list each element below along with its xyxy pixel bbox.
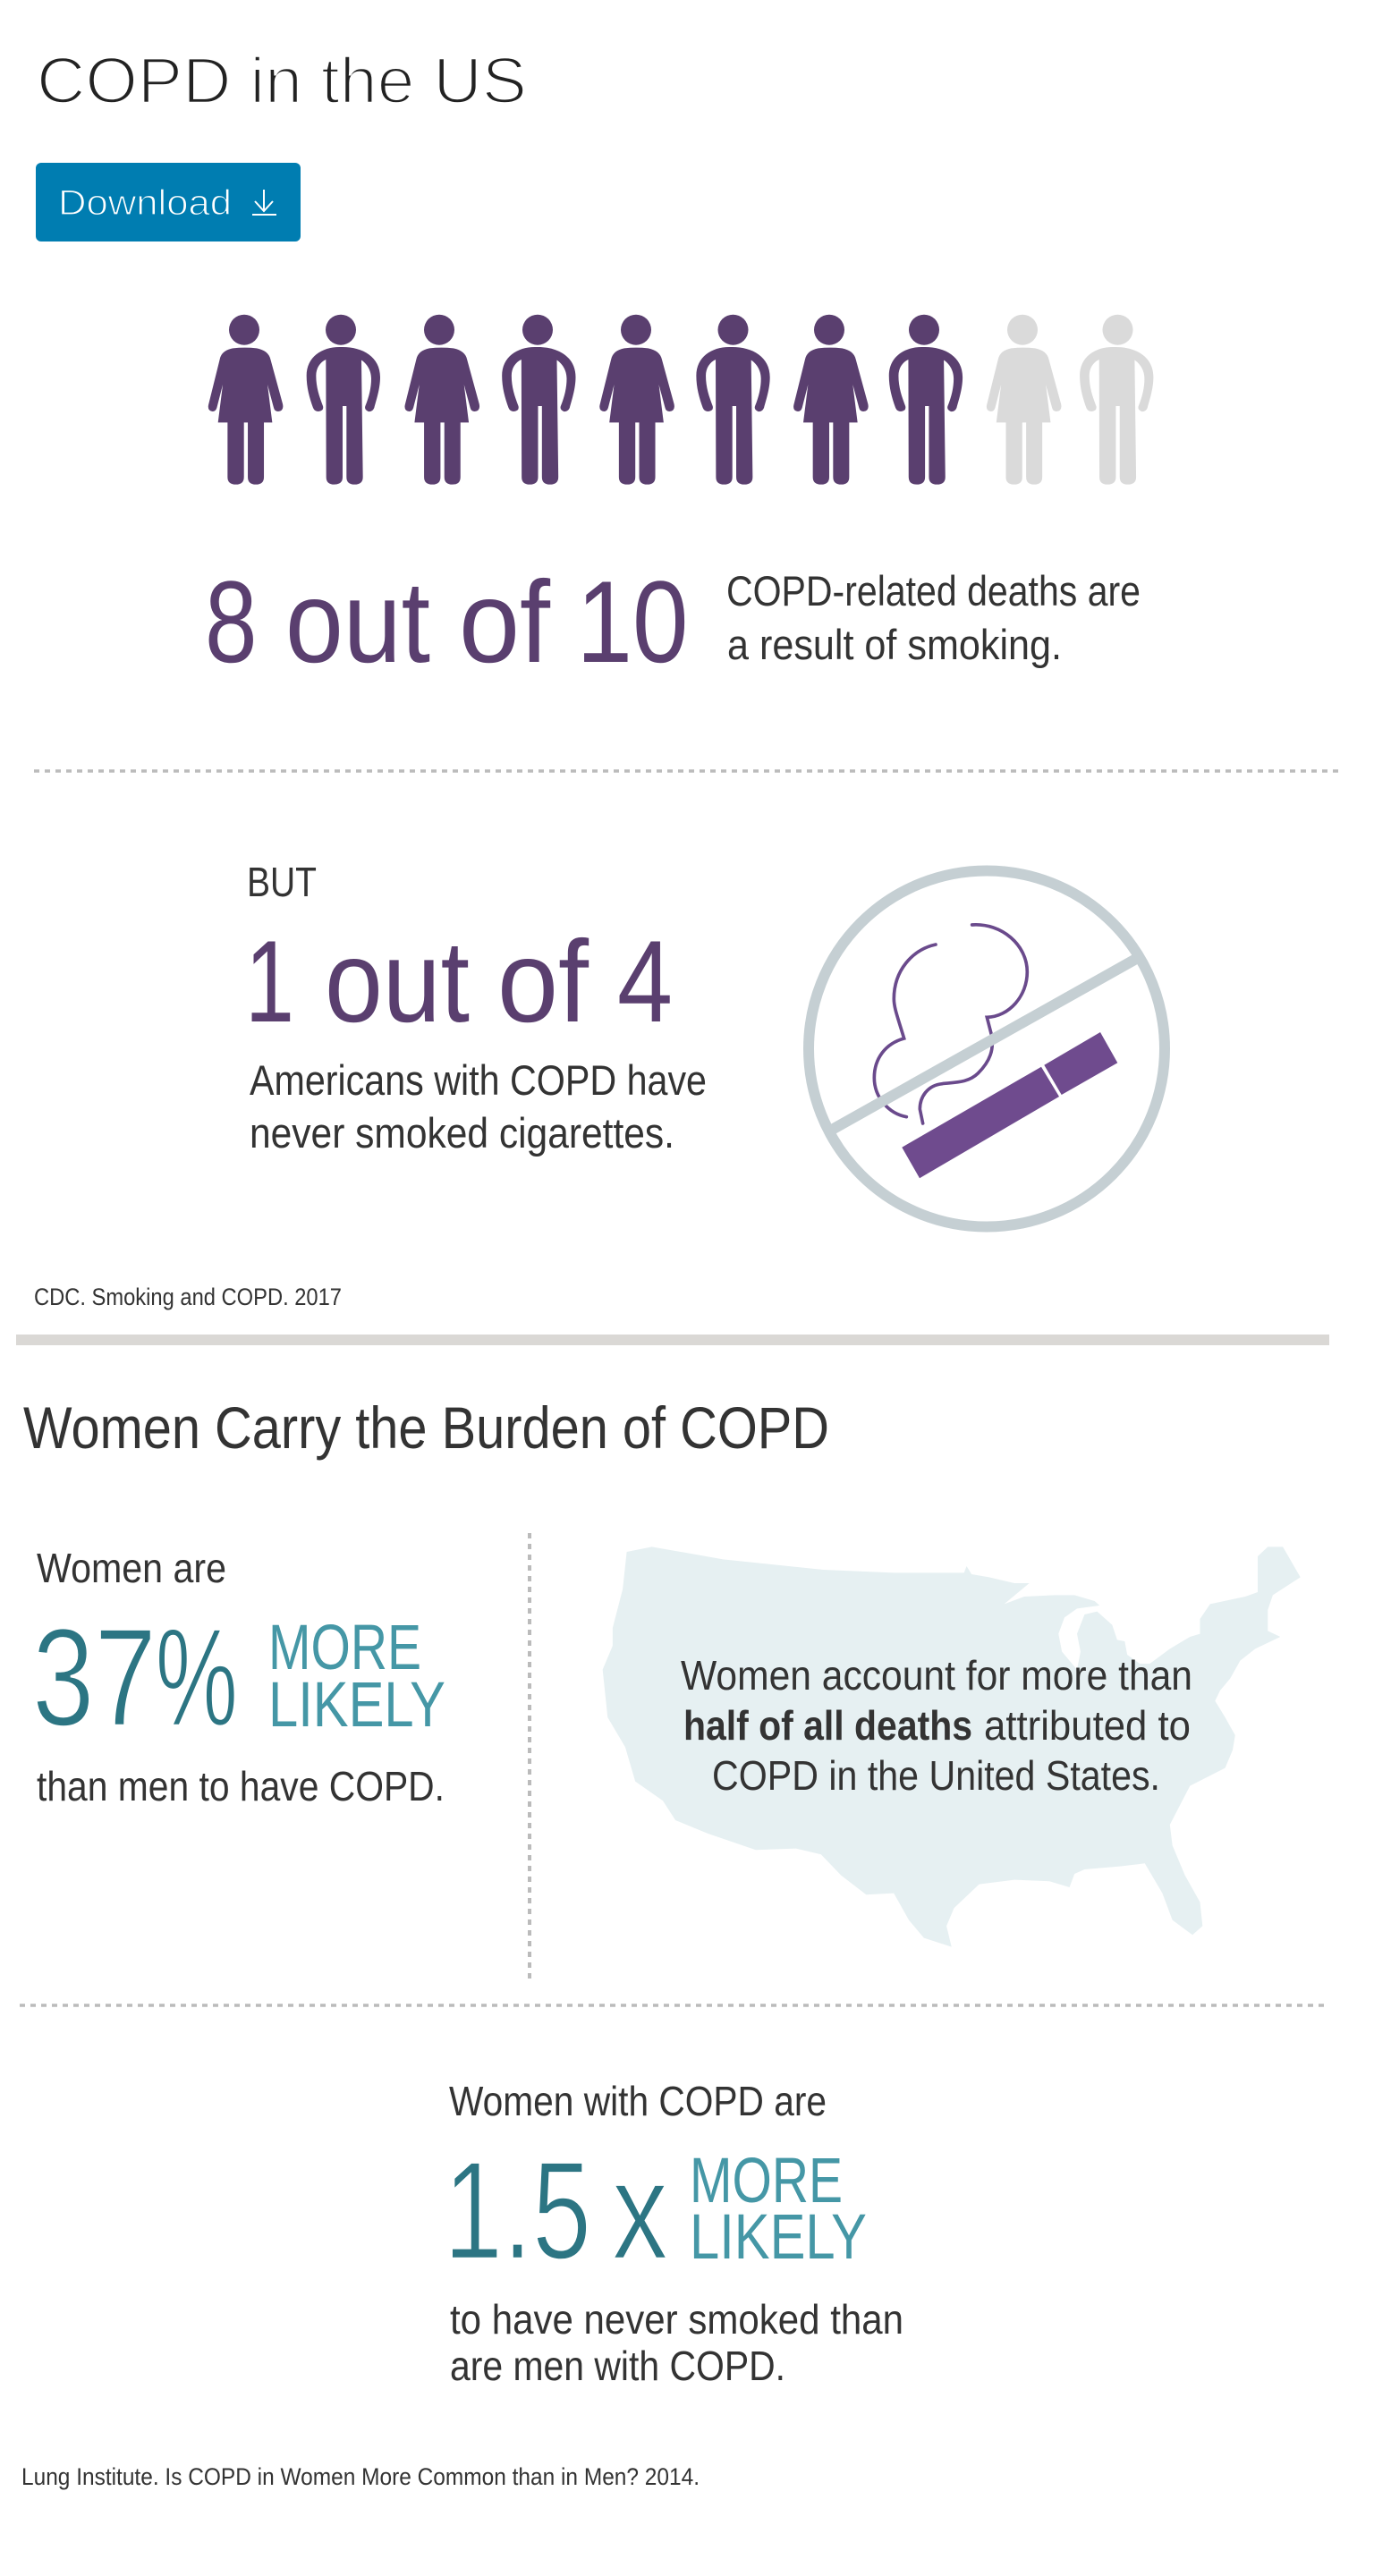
download button <box>36 163 301 242</box>
icon row: 8 of 10 people highlighted <box>208 315 1153 485</box>
statistic: 8 out of 10: 10 <box>576 556 689 687</box>
download button: Download <box>58 183 232 223</box>
callout text: half of all deaths <box>683 1702 972 1749</box>
text: Americans with COPD: Americans with COPD have <box>250 1056 707 1104</box>
text: COPD-related deaths: COPD-related deaths are <box>726 567 1141 614</box>
panel: 37% more likely: Women are <box>37 1545 226 1591</box>
text: Americans with COPD: never smoked cigarettes. <box>250 1109 674 1157</box>
source: Lung Institute: Lung Institute. Is COPD in Women More Common than in Men? 2014. <box>21 2463 700 2490</box>
icon: no smoking <box>809 871 1165 1227</box>
panel: 1.5x more likely: are men with COPD. <box>450 2343 785 2389</box>
statistic: 8 out of 10: of <box>459 556 551 687</box>
text: COPD-related deaths <box>726 567 1141 668</box>
statistic: 1 out of 4: of <box>497 916 589 1046</box>
statistic: 8 out of 10: 8 <box>205 556 258 687</box>
panel: 1.5x more likely: LIKELY <box>690 2202 867 2273</box>
panel: 37% more likely: MORE <box>268 1613 421 1683</box>
panel: 1.5x more likely: x <box>612 2133 668 2289</box>
source: CDC: CDC. Smoking and COPD. 2017 <box>34 1284 342 1310</box>
panel: US map with callout <box>603 1546 1301 1947</box>
panel: 1.5x more likely: to have never smoked than <box>450 2296 903 2343</box>
statistic: 1 out of 4 <box>245 916 673 1046</box>
text: COPD-related deaths: a result of smoking. <box>727 621 1062 668</box>
heading: Women Carry the Burden: Women Carry the Burden of COPD <box>23 1394 829 1461</box>
map of the United States <box>603 1546 1301 1947</box>
panel: 1.5x more likely: MORE <box>690 2146 843 2216</box>
text: Americans with COPD <box>250 1056 707 1157</box>
panel: 37% more likely: 37 <box>32 1600 157 1756</box>
statistic: 1 out of 4: 4 <box>617 916 673 1046</box>
callout text: Women account for more than <box>681 1652 1192 1699</box>
callout text <box>681 1652 1192 1799</box>
panel: 37% more likely: % <box>156 1600 238 1756</box>
panel: 37% more likely: LIKELY <box>268 1670 445 1741</box>
statistic: 1 out of 4: 1 <box>245 916 294 1046</box>
panel: 1.5x more likely <box>444 2078 903 2389</box>
callout text: COPD in the United States. <box>712 1752 1160 1799</box>
title: COPD in the US <box>37 46 527 117</box>
statistic: 8 out of 10 <box>205 556 689 687</box>
statistic: 1 out of 4: out <box>325 916 470 1046</box>
text: BUT: BUT <box>247 859 317 905</box>
callout text: attributed to <box>984 1702 1191 1749</box>
panel: 37% more likely: than men to have COPD. <box>37 1763 445 1809</box>
panel: 1.5x more likely: Women with COPD are <box>449 2078 827 2124</box>
panel: 1.5x more likely: 1.5 <box>444 2133 591 2289</box>
statistic: 8 out of 10: out <box>285 556 430 687</box>
panel: 37% more likely <box>32 1545 445 1809</box>
